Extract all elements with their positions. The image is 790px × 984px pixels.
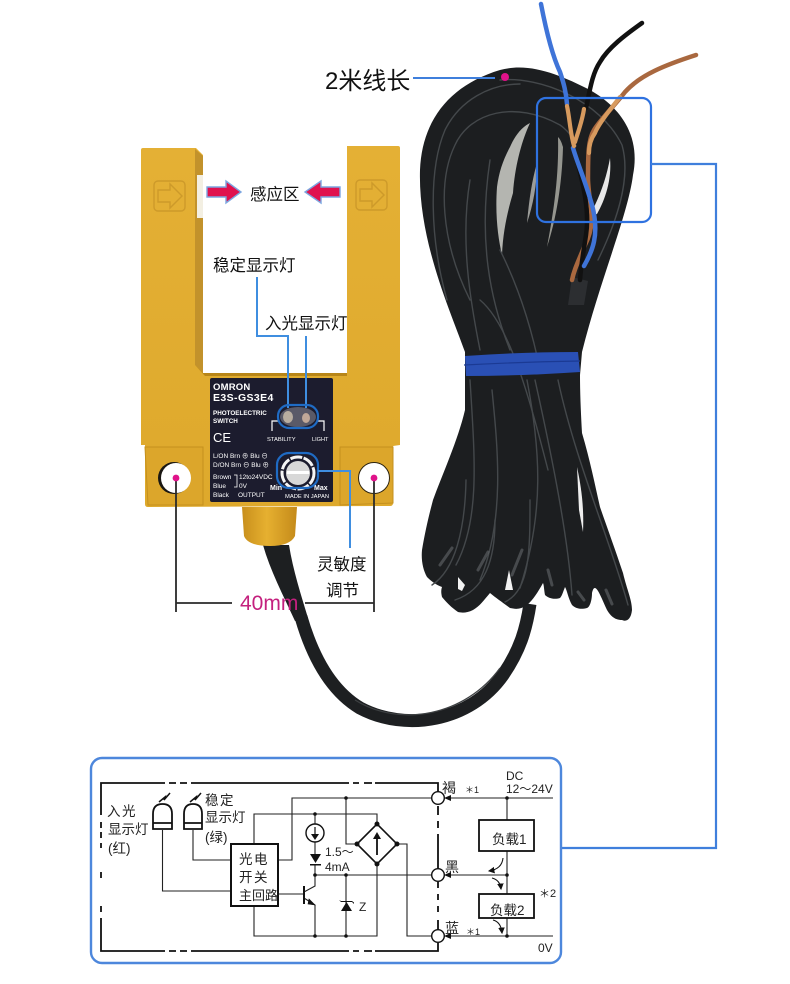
dashed sensor boundary: [101, 783, 438, 951]
terminal text: [442, 780, 556, 937]
stability label: STABILITY: [267, 437, 296, 443]
lamp text red: 入光: [107, 804, 137, 819]
lamp text red: 显示灯: [108, 822, 148, 837]
wiring legend: L/ON Brn ⊕ Blu ⊖: [213, 452, 268, 460]
panel frame: [91, 758, 561, 963]
sensor body: [141, 146, 400, 546]
black product label: Max: [314, 485, 328, 492]
coiled cable: [420, 4, 696, 621]
outer jacket end: [568, 277, 588, 305]
sensing zone callout: [207, 181, 340, 204]
Z label: Z: [359, 900, 366, 914]
inner face of left arm: [195, 149, 203, 373]
model: E3S-GS3E4: [213, 392, 274, 404]
light lamp label: 入光显示灯: [265, 314, 348, 333]
load 1: 负载1: [492, 832, 527, 847]
lamp text green: 显示灯: [205, 810, 246, 825]
black product label: 0V: [239, 483, 248, 490]
current text: 4mA: [325, 860, 350, 874]
blue conductor: [541, 4, 595, 266]
knob highlight: [277, 453, 318, 488]
brand: OMRON: [213, 382, 250, 393]
junction dots: [313, 796, 509, 938]
loop highlights: [432, 80, 628, 605]
rectifier bridge: [357, 824, 397, 864]
black product label: D/ON Brn ⊖ Blu ⊕: [213, 461, 269, 469]
black product label: Brown: [213, 474, 232, 481]
origin: MADE IN JAPAN: [285, 494, 329, 500]
brown conductor: [572, 55, 696, 280]
current source: [306, 824, 324, 842]
leader line: [318, 471, 350, 548]
black product label: Black: [213, 492, 230, 499]
recess steps at the mounting holes: [145, 447, 393, 505]
type line two: SWITCH: [213, 418, 238, 425]
stability lamp label: 稳定显示灯: [213, 256, 296, 275]
load 2: 负载2: [490, 903, 525, 918]
lamp text red: [107, 804, 148, 856]
marker dot: [501, 73, 509, 81]
diode: [310, 854, 321, 866]
coil silhouette: [420, 68, 635, 621]
terminal arrows: [444, 795, 451, 939]
cable length label: [325, 68, 509, 95]
leader line: [413, 77, 495, 79]
label line two: 调节: [326, 581, 359, 600]
leader lines: [257, 277, 306, 408]
black product label: [210, 378, 333, 502]
gaps showing background: [496, 123, 530, 255]
current arrow load 1: [489, 858, 503, 871]
supply text: 12～24V: [506, 782, 553, 796]
wiring lines: [162, 798, 553, 936]
40mm dimension: [173, 475, 377, 615]
lamp text green: 稳定: [205, 793, 235, 808]
wire highlight and connector to circuit: [537, 98, 716, 848]
dimension value: 40mm: [240, 592, 298, 615]
main circuit box: [231, 844, 278, 906]
supply text: [506, 769, 553, 955]
min max: Min: [270, 485, 282, 492]
type: PHOTOELECTRIC: [213, 410, 267, 417]
cable length label: 2米线长: [325, 68, 410, 95]
left arrow: [207, 181, 241, 203]
zener diode: [339, 900, 354, 911]
blue band around coil: [464, 352, 580, 376]
lamp text green: [205, 793, 246, 845]
supply text: DC: [506, 769, 524, 783]
current arrow load 2: [493, 920, 502, 933]
connector collar: [242, 507, 297, 546]
terminal text: 黑: [445, 859, 459, 875]
label: 感应区: [250, 185, 300, 204]
mounting holes: [158, 462, 390, 494]
main circuit box: 光电: [239, 852, 269, 867]
terminal text: ＊2: [539, 888, 556, 900]
black product label: 12to24VDC: [239, 474, 273, 481]
black conductor: [577, 23, 642, 280]
terminals: [432, 792, 444, 942]
terminal text: 褐: [442, 780, 456, 796]
CE mark: CE: [213, 430, 231, 445]
current text: 1.5～: [325, 845, 354, 859]
LED lamp one: [153, 793, 172, 829]
cable from sensor to coil: [263, 545, 530, 721]
terminal text: ＊1: [466, 927, 480, 937]
terminal text: 蓝: [445, 920, 459, 936]
current arrow black: [492, 878, 501, 889]
bracket marks: [272, 421, 324, 431]
embossed arrow left: [154, 181, 185, 211]
label: 灵敏度: [317, 555, 366, 574]
yellow U-shaped housing: [141, 146, 400, 507]
main circuit box: 主回路: [239, 888, 278, 903]
load 1: [479, 820, 534, 851]
LED lens: [280, 407, 316, 427]
terminal text: ＊1: [465, 785, 479, 795]
load 2: [479, 894, 534, 918]
LED lamp two: [184, 793, 202, 829]
lamp highlight: [278, 405, 318, 428]
twisted copper strands: [567, 97, 620, 153]
black product label: Blue: [213, 483, 226, 490]
lamp text green: (绿): [205, 830, 228, 845]
indicator lamp callouts: [213, 256, 348, 428]
supply text: 0V: [538, 941, 553, 955]
sensitivity callout: [277, 453, 366, 600]
right arrow: [305, 181, 340, 203]
sensitivity knob: [282, 457, 314, 489]
circuit diagram panel: [91, 758, 561, 963]
light label: LIGHT: [312, 437, 329, 443]
current text: [325, 845, 354, 874]
transistor: [304, 886, 315, 905]
black product label: OUTPUT: [238, 492, 265, 499]
embossed arrow right: [356, 180, 387, 210]
main circuit box: 开关: [239, 870, 269, 885]
lamp text red: (红): [108, 841, 130, 856]
